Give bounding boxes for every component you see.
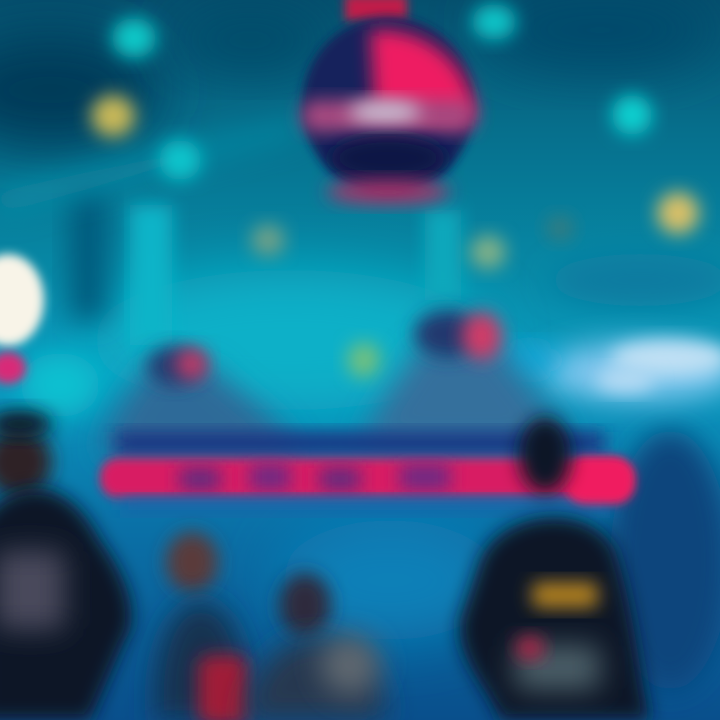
person: small child left: [154, 532, 248, 720]
light: yellow left: [91, 95, 135, 137]
light: teal top: [472, 4, 516, 40]
light: teal right: [612, 95, 652, 135]
person: left foreground: [0, 410, 132, 720]
moon: glowing white orb: [0, 254, 44, 384]
right dome on banner: [360, 310, 570, 445]
left dome on banner: [100, 346, 300, 455]
right white glow: [500, 340, 720, 402]
banner: [100, 432, 635, 512]
hanging lights: [91, 4, 699, 378]
hanging ornament: [302, 0, 474, 204]
light: teal left: [159, 140, 201, 180]
light: pale mid right: [470, 235, 506, 269]
light: teal top left: [112, 18, 156, 58]
light: green centre: [347, 342, 381, 378]
person: small child centre: [245, 573, 385, 720]
person: right foreground: [460, 417, 650, 720]
light: faint right: [546, 215, 574, 241]
light: yellow right: [657, 192, 699, 234]
light: pale mid left: [251, 224, 285, 256]
